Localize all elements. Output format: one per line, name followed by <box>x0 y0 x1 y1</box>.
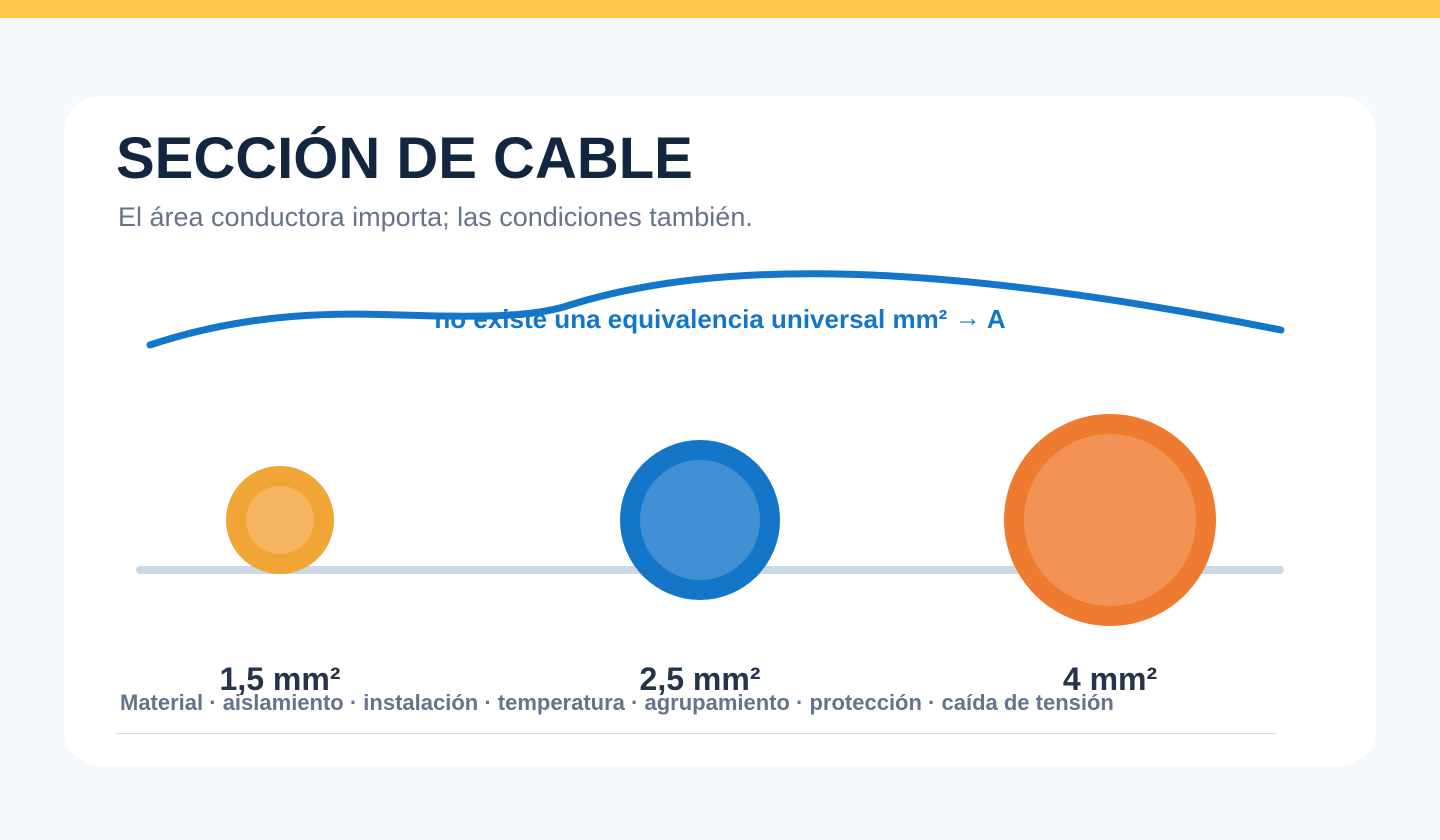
icon: 2,5 mm² cable section <box>620 440 780 600</box>
callout text: → <box>955 302 981 332</box>
icon: 1,5 mm² cable section <box>226 466 334 574</box>
label: 2,5 mm²: 2,5 mm² <box>640 661 760 697</box>
label: 1,5 mm²: 1,5 mm² <box>220 661 340 697</box>
subtitle: El área conductora importa; las condiciones también. <box>118 202 753 232</box>
callout text: no existe una equivalencia universal mm² <box>434 304 947 334</box>
title: SECCIÓN DE CABLE <box>116 126 693 191</box>
baseline bar <box>136 566 1284 574</box>
callout text: A <box>981 304 1006 334</box>
curve line <box>150 274 1281 345</box>
icon: 4 mm² cable section <box>1004 414 1216 626</box>
panel: main card <box>64 96 1376 766</box>
label: 4 mm²: 4 mm² <box>1063 661 1157 697</box>
footer factors text: Material · aislamiento · instalación · temperatura · agrupamiento · protección · caída de tensión <box>120 690 1114 715</box>
top accent bar <box>0 0 1440 18</box>
